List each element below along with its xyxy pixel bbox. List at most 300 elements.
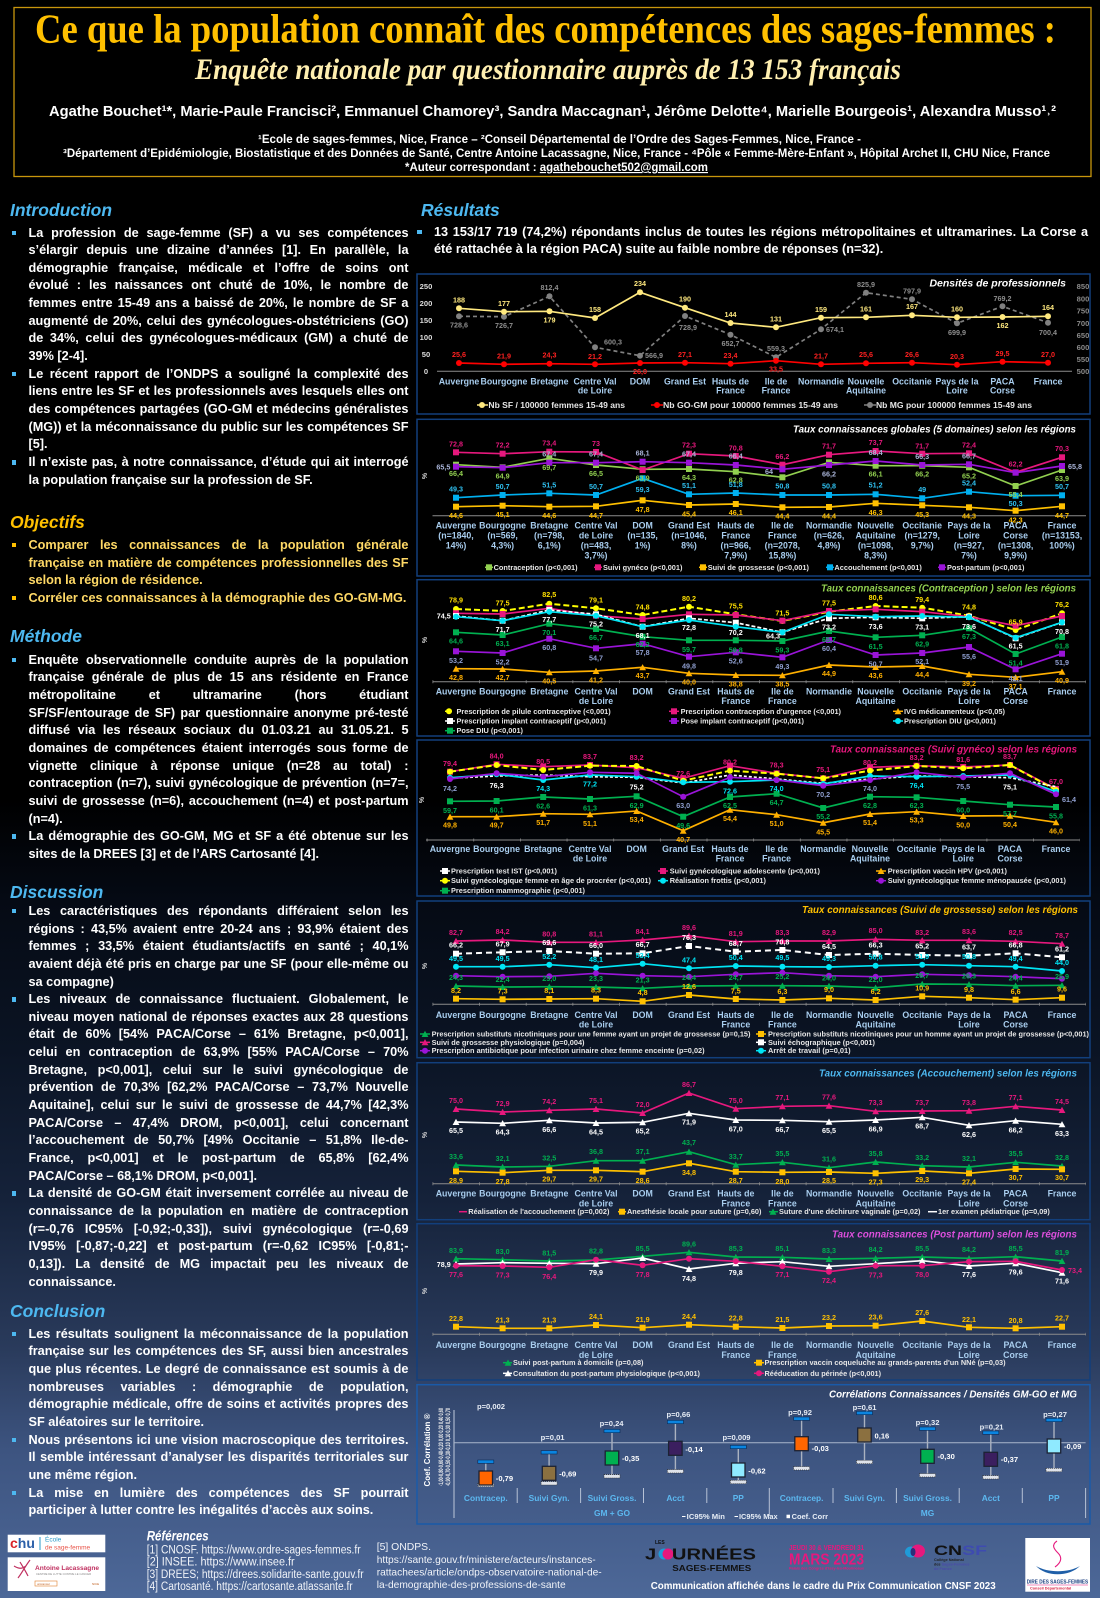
- labels: anesthesia values: 29,7: [542, 1174, 556, 1184]
- coefficient values: -0,14: [685, 1445, 703, 1454]
- region labels: Aquitaine: [846, 386, 886, 396]
- series: IUD insertion: [456, 624, 1062, 654]
- text block: Discussion: PACA/Corse – 47,4% DROM, p<0,001], celui concernant: [28, 1116, 408, 1130]
- region labels: France: [768, 1020, 797, 1030]
- logo: Antoine Lacassagne: [8, 1557, 105, 1591]
- labels: pill values: 65,9: [1009, 618, 1023, 626]
- labels: ultrasound values: 66,7: [636, 940, 650, 949]
- text block: Méthode: française générale de plus de 15 ans résidente en France: [28, 670, 408, 684]
- labels: physiological values: 82,9: [822, 928, 836, 937]
- labels: pediatric exam values: 63,3: [1055, 1129, 1069, 1138]
- region labels: de Loire: [579, 1020, 613, 1030]
- labels: sick leave values: 49,4: [1009, 954, 1023, 963]
- legend: Pose DIU (p<0,001): [456, 726, 523, 735]
- labels: ultrasound values: 64,5: [822, 942, 836, 951]
- panel: post-partum knowledge chart: [417, 1224, 1090, 1380]
- labels: HPV values: 50,4: [1003, 820, 1017, 829]
- region labels: Ile de: [771, 1010, 794, 1020]
- labels: GO-GM density values: 33,5: [769, 364, 783, 374]
- labels: implant prescription values: 61,5: [1009, 642, 1023, 650]
- region labels with sample sizes: (n=1840,: [438, 531, 474, 541]
- labels: SF density values: 164: [1042, 303, 1054, 312]
- labels: mammography values: [443, 798, 1063, 830]
- text block: Discussion: Les niveaux de connaissance fluctuaient. Globalement, le: [28, 992, 408, 1006]
- p values: p=0,24: [600, 1419, 624, 1428]
- region labels: Nouvelle: [857, 1010, 894, 1020]
- labels: implant insertion values: 52,2: [496, 658, 510, 666]
- legend: IVG médicamenteux (p<0,05): [904, 707, 1005, 716]
- text block: Introduction: des compétences partagées (GO-GM et médecins généralistes: [28, 402, 408, 416]
- labels: pertussis vaccine values: 22,1: [962, 1315, 976, 1324]
- region labels: Loire: [952, 854, 974, 864]
- labels: gynecological values: 71,7: [915, 442, 929, 450]
- legend: Suture d'une déchirure vaginale (p=0,02): [779, 1207, 921, 1216]
- region labels: Grand Est: [662, 844, 704, 854]
- labels: post-partum values: 67,4: [589, 450, 603, 458]
- labels: implant prescription values: 73,1: [915, 622, 929, 632]
- legend: Suivi gynéco (p<0,001): [603, 563, 683, 572]
- labels: consultation values: 71,6: [1055, 1276, 1069, 1286]
- p values: p=0,21: [980, 1422, 1004, 1432]
- labels: menopause values: 75,5: [956, 782, 970, 791]
- panel: gynecological follow-up knowledge chart: [417, 740, 1090, 896]
- labels: HPV values: [443, 814, 1063, 844]
- labels: GO-GM density values: 21,2: [588, 352, 602, 361]
- labels: implant prescription values: 73,6: [869, 622, 883, 631]
- region labels with sample sizes: Corse: [1003, 531, 1028, 541]
- region labels: de Loire: [579, 696, 613, 706]
- legend: Suivi de grossesse physiologique (p=0,004): [432, 1038, 585, 1047]
- p values: p=0,66: [666, 1410, 690, 1419]
- logo: CHU de Nice, Ecole de sage-femme: de sage-femme: [45, 1544, 91, 1552]
- region labels: Bourgogne: [473, 844, 520, 854]
- region labels with sample sizes: 8%): [681, 541, 697, 551]
- text block: Méthode: sites de la DREES [3] et de l’ARS Cartosanté [4].: [28, 847, 319, 861]
- region labels: Grand Est: [668, 1189, 710, 1199]
- labels: pertussis vaccine values: 21,9: [636, 1315, 650, 1324]
- panel: pregnancy follow-up knowledge chart: [417, 901, 1090, 1058]
- labels: abortion values: 37,1: [1009, 682, 1023, 691]
- labels: anesthesia values: 29,7: [589, 1174, 603, 1184]
- labels: mammography values: 55,2: [816, 812, 830, 821]
- text block: Introduction: évolué : les naissances ont chuté de 10%, le nombre de: [28, 278, 408, 292]
- labels: IUD insertion values: 63,1: [496, 639, 510, 648]
- labels: suture values: 37,1: [636, 1147, 650, 1156]
- labels: nicotine women values: 26,7: [915, 971, 929, 980]
- legend: Arrêt de travail (p=0,01): [768, 1046, 851, 1055]
- labels: consultation values: 74,8: [682, 1274, 696, 1283]
- labels: anesthesia values: [449, 1168, 1069, 1186]
- labels: delivery values: [449, 1080, 1069, 1109]
- labels: pediatric exam values: 64,5: [589, 1128, 603, 1136]
- text block: Discussion: Aquitaine], celui sur le suivi de grossesse de 44,7% [42,3%: [28, 1098, 408, 1112]
- labels: pediatric exam values: 71,9: [682, 1118, 696, 1126]
- series: HPV vaccine: [450, 810, 1056, 831]
- labels: post-partum values: 65,5: [436, 462, 450, 472]
- labels: pregnancy values: 42,3: [1009, 516, 1023, 524]
- labels: pill values: 80,2: [682, 594, 696, 603]
- labels: menopause values: 63,0: [676, 801, 690, 810]
- labels: implant insertion values: 57,8: [636, 648, 650, 657]
- text block: Discussion: l’accouchement de 50,7% [49% Occitanie – 51,8% Ile-de-: [28, 1133, 408, 1147]
- text block: Discussion: France, p<0,001] et le post-partum de 65,8% [62,4%: [28, 1151, 408, 1165]
- labels: post-partum values: 66,7: [962, 452, 976, 460]
- region labels: Nouvelle: [848, 376, 884, 386]
- labels: adolescent values: 78,3: [770, 760, 784, 770]
- region labels: Ile de: [771, 1189, 794, 1199]
- labels: SF density values: 190: [679, 294, 691, 304]
- labels: pertussis vaccine values: 20,8: [1009, 1316, 1023, 1325]
- labels: gynecological values: 72,4: [962, 440, 976, 450]
- labels: abortion values: 43,7: [636, 671, 650, 680]
- labels: anesthesia values: 29,3: [915, 1175, 929, 1184]
- labels: HPV values: 45,5: [816, 828, 830, 836]
- labels: post-partum values: [436, 448, 1082, 478]
- labels: implant insertion values: 52,1: [915, 657, 929, 666]
- region labels: DOM: [632, 1340, 653, 1350]
- panel: correlations chart: [417, 1385, 1090, 1524]
- labels: perineal rehabilitation values: 77,3: [869, 1270, 883, 1280]
- labels: abortion values: 42,7: [496, 673, 510, 682]
- series: GO-GM density: [459, 361, 1048, 365]
- text block: Introduction: [5].: [28, 437, 48, 451]
- heading: Conclusion: Conclusion: [10, 1301, 105, 1321]
- panel: global knowledge chart: [417, 419, 1090, 576]
- labels: mammography values: 60,0: [956, 806, 970, 814]
- labels: childbirth values: 49: [918, 485, 926, 494]
- labels: childbirth values: 50,3: [1009, 499, 1023, 508]
- text block: Introduction: 39% [2-4].: [28, 349, 88, 363]
- labels: GO-GM density values: 26,6: [905, 350, 919, 359]
- labels: smear test values: 76,4: [910, 781, 924, 790]
- legend: Prescription test IST (p<0,001): [451, 866, 557, 876]
- labels: sick leave values: 49,5: [775, 953, 789, 962]
- labels: pertussis vaccine values: 27,6: [915, 1308, 929, 1317]
- labels: HPV values: 49,7: [490, 820, 504, 830]
- labels: childbirth values: 59,3: [636, 485, 650, 494]
- labels: ultrasound values: 66,3: [869, 940, 883, 950]
- region labels: PACA: [1003, 1340, 1028, 1350]
- labels: sick leave values: 50,8: [962, 952, 976, 961]
- labels: menopause values: 74,2: [443, 784, 457, 793]
- labels: GO-GM density values: 25,6: [859, 350, 873, 359]
- labels: adolescent values: 83,7: [583, 752, 597, 761]
- legend: Réalisation de l'accouchement (p=0,002): [468, 1207, 610, 1216]
- series: post-partum: [456, 461, 1062, 473]
- region labels: Hauts de: [717, 1010, 754, 1020]
- labels: perineal rehabilitation values: 77,3: [496, 1270, 510, 1280]
- labels: perineal rehabilitation values: 73,4: [1068, 1266, 1082, 1275]
- upper confidence bars: [478, 1411, 1062, 1463]
- labels: pediatric exam values: 67,0: [729, 1124, 743, 1134]
- region labels: Loire: [958, 1020, 980, 1030]
- labels: mammography values: 62,3: [910, 801, 924, 810]
- domain labels: Suivi Gross.: [588, 1493, 636, 1503]
- region labels: Loire: [946, 386, 968, 396]
- labels: implant insertion values: 53,2: [449, 656, 463, 665]
- region labels: Occitanie: [902, 1340, 942, 1350]
- labels: IUD insertion values: 67,3: [962, 632, 976, 641]
- labels: nicotine men values: 7,3: [498, 986, 508, 996]
- text block: Objectifs: Corréler ces connaissances à la démographie des GO-GM-MG.: [28, 591, 406, 605]
- region labels with sample sizes: 1%): [635, 541, 650, 551]
- region labels: Corse: [1003, 696, 1028, 706]
- labels: physiological values: 89,6: [682, 923, 696, 932]
- region labels with sample sizes: de Loire: [579, 531, 613, 541]
- text block: Conclusion: Il semble intéressant d’analyser les disparités territoriales sur: [28, 1450, 408, 1464]
- y axis label: %: [422, 1287, 429, 1294]
- text block: Conclusion: Les résultats soulignent la méconnaissance de la population: [28, 1327, 408, 1341]
- labels: nicotine men values: 12,6: [682, 982, 696, 991]
- text block: Conclusion: Nous présentons ici une vision macroscopique des territoires.: [28, 1433, 408, 1447]
- region labels: DOM: [632, 1189, 653, 1199]
- labels: contraception values: [449, 463, 1069, 499]
- chart title: Densités de professionnels: [929, 277, 1066, 289]
- labels: smear test values: 74,0: [770, 784, 784, 793]
- series: ultrasound follow-up: [456, 946, 1062, 957]
- coefficient values: -0,69: [559, 1470, 576, 1478]
- labels: contraception values: 66,4: [449, 469, 463, 478]
- event dates: [789, 1545, 864, 1570]
- text block: Conclusion: La mise en lumière des compétences des SF pourrait: [28, 1486, 408, 1500]
- labels: SF density values: 159: [815, 305, 827, 314]
- labels: abortion values: 40,9: [1055, 676, 1069, 685]
- region labels with sample sizes: (n=1308,: [998, 541, 1033, 551]
- region labels: France: [768, 696, 797, 706]
- labels: gynecological values: 71,7: [822, 442, 836, 450]
- labels: mammography values: 64,7: [770, 798, 784, 807]
- labels: ultrasound values: 63,7: [962, 942, 976, 952]
- labels: ultrasound values: 66,8: [1009, 940, 1023, 950]
- region labels: Normandie: [798, 376, 844, 386]
- domain labels: PP: [1048, 1493, 1060, 1503]
- labels: home follow-up values: 84,2: [962, 1245, 976, 1254]
- region labels: Auvergne: [439, 376, 479, 386]
- labels: mammography values: 62,8: [863, 801, 877, 810]
- labels: pill values: 79,1: [589, 596, 603, 604]
- labels: nicotine women values: 25,9: [1055, 972, 1069, 981]
- p values: p=0,32: [916, 1418, 939, 1427]
- legend: Prescription substituts nicotiniques pour une femme ayant un projet de grossesse (p=0,15): [432, 1030, 751, 1038]
- region labels: de Loire: [579, 1198, 613, 1208]
- region labels with sample sizes: 6,1%): [538, 541, 561, 551]
- labels: SF density values: 179: [544, 316, 556, 324]
- region labels: Pays de la: [942, 844, 985, 854]
- logo: Dire des sages-femmes: Conseil Départemental: [1030, 1587, 1071, 1591]
- right axis: 500: [1077, 367, 1089, 376]
- region labels with sample sizes: Auvergne: [436, 521, 476, 531]
- region labels: Ile de: [771, 686, 794, 696]
- legend: Contraception (p<0,001): [494, 563, 578, 572]
- region labels: Hauts de: [717, 1340, 754, 1350]
- labels: childbirth values: 50,7: [1055, 482, 1069, 491]
- labels: SF density values: 188: [453, 296, 465, 304]
- labels: sick leave values: 49,3: [822, 954, 836, 963]
- region labels: Corse: [998, 854, 1023, 864]
- text block: Introduction: la population française sur la profession de SF.: [28, 473, 313, 487]
- text block: Introduction: La profession de sage-femme (SF) a vu ses compétences: [28, 226, 408, 240]
- domain labels: Suivi Gyn.: [844, 1493, 885, 1503]
- region labels: Aquitaine: [850, 854, 890, 864]
- right axis: 750: [1077, 306, 1089, 316]
- p values: p=0,01: [541, 1433, 565, 1442]
- text block: Discussion: avaient déjà été pris en charge par une SF (pour elle-même ou: [28, 957, 408, 971]
- labels: suture values: 35,5: [775, 1149, 789, 1158]
- labels: IUD insertion values: 61,5: [869, 642, 883, 651]
- labels: ultrasound values: 70,8: [775, 938, 789, 946]
- region labels: DOM: [630, 376, 650, 386]
- logo: Dire des sages-femmes: DIRE DES SAGES-FEMMES: [1027, 1580, 1088, 1586]
- affiliations: ³Département d’Epidémiologie, Biostatistique et des Données de Santé, Centre Antoine Lacassagne, Nice, France - ⁴Pôle « Femme-Mère-Enfant », Hôpital Archet II, CHU Nice, France: [63, 148, 1050, 160]
- labels: sick leave values: 48,1: [589, 955, 603, 964]
- region labels: Corse: [990, 386, 1015, 396]
- labels: HPV values: 53,3: [910, 816, 924, 824]
- left axis: 100: [420, 333, 432, 342]
- references, column one: [1] CNOSF. https://www.ordre-sages-femmes.fr: [147, 1544, 361, 1556]
- text block: Discussion: (r=-0,76 IC95% [-0,92;-0,33]), suivi gynécologique (r=-0,69: [28, 1222, 408, 1236]
- labels: sick leave values: 53,4: [636, 951, 650, 960]
- labels: sick leave values: 51,9: [915, 952, 929, 961]
- legend: Nb SF / 100000 femmes 15-49 ans: [488, 400, 625, 410]
- region labels with sample sizes: (n=626,: [814, 531, 844, 541]
- region labels with sample sizes: 15,8%): [768, 551, 796, 561]
- labels: contraception values: 63,9: [636, 474, 650, 482]
- text block: Discussion: La densité de GO-GM était inversement corrélée au niveau de: [28, 1186, 408, 1200]
- region labels with sample sizes: Bretagne: [530, 521, 568, 531]
- labels: pregnancy values: 44,6: [542, 511, 556, 520]
- region labels: Occitanie: [902, 1010, 942, 1020]
- labels: suture values: 36,8: [589, 1147, 603, 1156]
- labels: nicotine women values: 26,3: [962, 972, 976, 980]
- legend: Prescription vaccin HPV (p<0,001): [888, 866, 1007, 876]
- region labels with sample sizes: Ile de: [771, 521, 794, 531]
- labels: IUD insertion values: 65,7: [822, 635, 836, 644]
- series: IUD prescription: [456, 612, 1062, 638]
- labels: menopause values: 70,2: [816, 790, 830, 799]
- region labels: Bourgogne: [479, 1010, 526, 1020]
- labels: implant insertion values: 49,3: [775, 662, 789, 671]
- labels: IUD insertion values: 59,8: [729, 646, 743, 654]
- region labels: [436, 1189, 1077, 1208]
- text block: Introduction: Il n’existe pas, à notre connaissance, d’étude qui ait interrogé: [28, 455, 408, 469]
- region labels: [430, 844, 1071, 864]
- text block: Introduction: femmes entre 15-49 ans a baissé de 20%, le nombre de SF a: [28, 296, 408, 310]
- labels: implant prescription values: 73,2: [822, 622, 836, 632]
- labels: pertussis vaccine values: 23,6: [869, 1312, 883, 1322]
- region labels: Pays de la: [947, 686, 991, 696]
- text block: Méthode: La démographie des GO-GM, MG et SF a été obtenue sur les: [28, 829, 408, 843]
- labels: delivery values: 77,1: [1009, 1093, 1023, 1102]
- region labels: Corse: [1003, 1198, 1028, 1208]
- labels: gynecological values: 66,2: [775, 452, 789, 461]
- region labels: Nouvelle: [852, 844, 888, 854]
- series: childbirth: [456, 478, 1062, 498]
- region labels: Normandie: [800, 844, 846, 854]
- region labels with sample sizes: 9,9%): [1004, 551, 1027, 561]
- labels: abortion values: [449, 669, 1069, 691]
- logo: Antoine Lacassagne: Antoine Lacassagne: [35, 1565, 99, 1572]
- labels: nicotine women values: 25,2: [775, 972, 789, 981]
- region labels: PACA: [990, 376, 1015, 386]
- labels: smear test values: 72,6: [723, 786, 737, 796]
- labels: nicotine women values: 22,0: [869, 975, 883, 984]
- text block: Conclusion: une même région.: [28, 1468, 137, 1482]
- region labels with sample sizes: (n=135,: [627, 531, 658, 541]
- region labels: Bourgogne: [479, 1189, 526, 1199]
- labels: STI test values: 75,2: [630, 782, 644, 792]
- labels: implant prescription values: 70,2: [729, 628, 743, 637]
- text block: Discussion: IV95% [-0,87;-0,22] et post-partum (r=-0,62 IC95% [-0,81;-: [28, 1239, 408, 1253]
- logo: Antoine Lacassagne: NICE: [92, 1582, 99, 1586]
- labels: ultrasound values: 66,0: [589, 941, 603, 950]
- text block: Discussion: 0,13]). La densité de MG impactait peu les niveaux de: [28, 1257, 408, 1271]
- labels: pediatric exam values: 68,7: [915, 1122, 929, 1130]
- labels: nicotine women values: 24,0: [822, 974, 836, 982]
- labels: childbirth values: 50,8: [822, 482, 836, 490]
- labels: implant prescription values: 68,1: [636, 631, 650, 640]
- legend: [503, 1358, 1006, 1378]
- labels: suture values: 31,6: [822, 1154, 836, 1164]
- labels: pregnancy values: 45,3: [915, 510, 929, 519]
- legend: Suivi échographique (p<0,001): [768, 1038, 875, 1047]
- coefficient values: -0,30: [938, 1452, 955, 1461]
- labels: mammography values: 59,7: [443, 806, 457, 815]
- labels: anesthesia values: 28,5: [822, 1176, 836, 1185]
- region labels: Aquitaine: [856, 1020, 896, 1030]
- series: perineal rehabilitation: [456, 1259, 1062, 1272]
- region labels: PACA: [1003, 1010, 1028, 1020]
- labels: home follow-up values: 85,1: [775, 1244, 789, 1253]
- region labels: France: [721, 696, 750, 706]
- text block: Introduction: s’élargir depuis une dizaine d’années [1]. En parallèle, la: [28, 243, 408, 257]
- affiliations: ¹Ecole de sages-femmes, Nice, France – ²Conseil Départemental de l’Ordre des Sages-Femmes, Nice, France -: [258, 134, 861, 146]
- labels: GO-GM density values: [452, 349, 1055, 376]
- region labels: [439, 376, 1063, 396]
- legend: Prescription vaccin coqueluche au grands-parents d'un NNé (p=0,03): [764, 1358, 1006, 1367]
- labels: pill values: 76,2: [1055, 600, 1069, 609]
- labels: sick leave values: 47,4: [682, 956, 696, 964]
- region labels: Auvergne: [430, 844, 470, 854]
- affiliations: [63, 134, 1050, 174]
- series: adolescent follow-up: [450, 764, 1056, 789]
- right axis: 800: [1077, 294, 1089, 304]
- labels: MG density values: 700,4: [1039, 328, 1057, 337]
- region labels: France: [762, 854, 791, 864]
- labels: physiological values: 78,7: [1055, 931, 1069, 940]
- labels: implant insertion values: 60,4: [822, 644, 836, 653]
- labels: childbirth values: [449, 478, 1069, 508]
- labels: home follow-up values: 85,3: [729, 1244, 743, 1253]
- labels: GO-GM density values: 23,4: [724, 351, 738, 360]
- region labels: [436, 686, 1077, 706]
- text block: Introduction: liens entre les SF et les professionnels aves lesquels elles ont: [28, 384, 408, 398]
- region labels: Grand Est: [664, 376, 706, 386]
- labels: nicotine men values: 9,0: [824, 985, 834, 994]
- labels: STI test values: 76,3: [490, 781, 504, 790]
- labels: pill values: 77,5: [822, 598, 836, 608]
- text block: Introduction: de 34%, celui des gynécologues-médicaux (GM) a chuté de: [28, 331, 408, 345]
- logo: CHU de Nice, Ecole de sage-femme: École: [45, 1534, 62, 1544]
- y axis label: %: [422, 962, 429, 969]
- labels: post-partum values: 68,1: [636, 448, 650, 458]
- region labels: Ile de: [771, 1340, 794, 1350]
- labels: ultrasound values: 67,9: [496, 940, 510, 948]
- chart title: Corrélations Connaissances / Densités GM-GO et MG: [829, 1389, 1077, 1401]
- region labels: Pays de la: [947, 1010, 991, 1020]
- labels: contraception values: 55,4: [1009, 490, 1023, 499]
- text block: Discussion: Les caractéristiques des répondants différaient selon les: [28, 904, 408, 918]
- labels: IUD insertion values: 62,9: [915, 640, 929, 648]
